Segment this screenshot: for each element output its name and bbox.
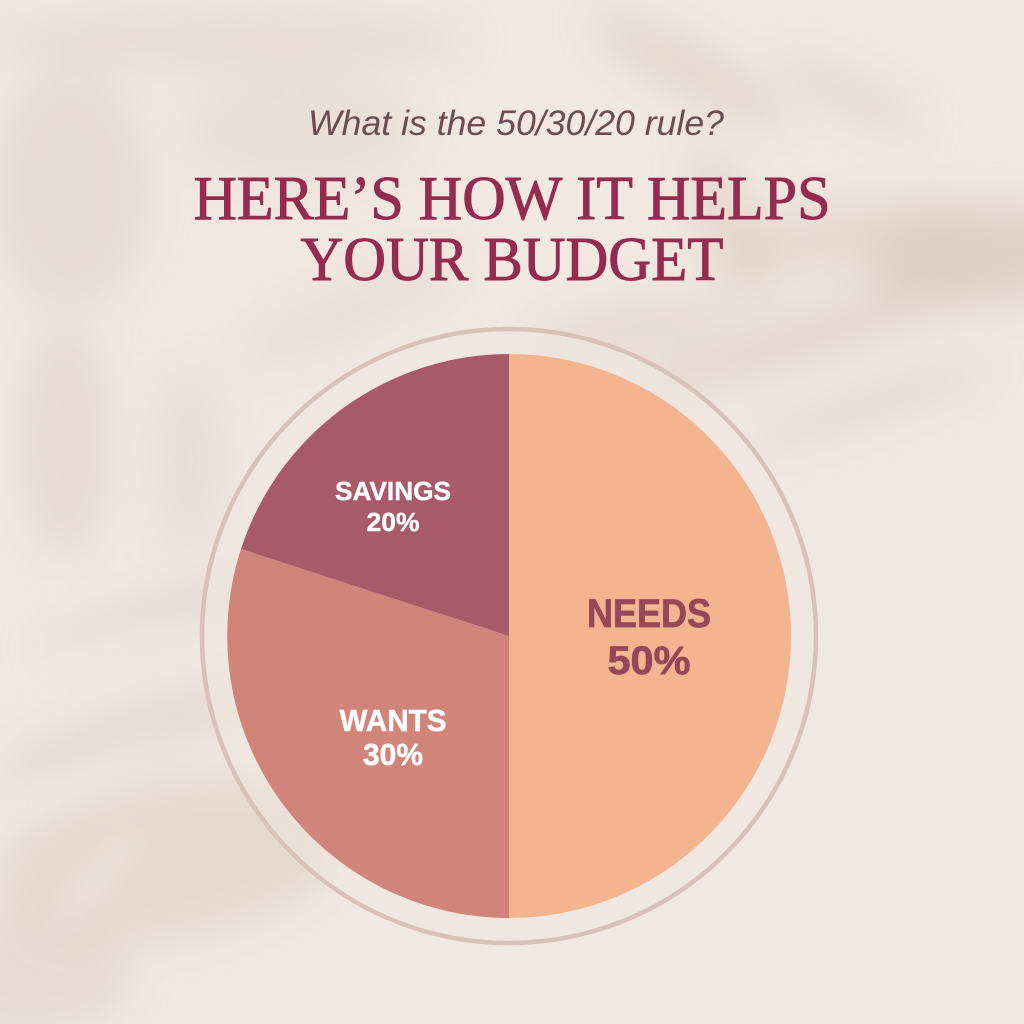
slice: wants 30% <box>227 549 509 918</box>
label: savings: 20% <box>366 507 420 537</box>
label: needs <box>587 592 711 683</box>
pie chart outer ring <box>202 329 816 943</box>
label: savings: SAVINGS <box>335 476 451 506</box>
label: wants: WANTS <box>340 703 446 738</box>
pie chart <box>227 354 791 918</box>
title <box>194 165 830 294</box>
label: needs: NEEDS <box>587 592 711 636</box>
label: savings <box>335 476 451 537</box>
subtitle: What is the 50/30/20 rule? <box>308 104 725 143</box>
title: YOUR BUDGET <box>300 226 724 294</box>
title: HERE’S HOW IT HELPS <box>194 165 830 233</box>
slice: needs 50% <box>509 354 791 918</box>
label: wants: 30% <box>363 737 423 772</box>
slice: savings 20% <box>241 354 509 636</box>
label: needs: 50% <box>608 639 690 683</box>
label: wants <box>340 703 446 772</box>
